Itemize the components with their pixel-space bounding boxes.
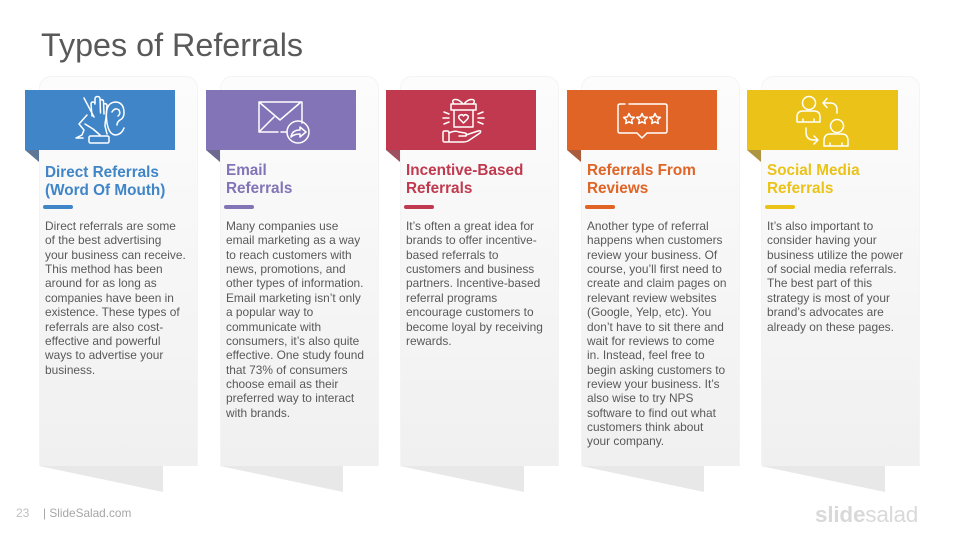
body text: create and claim pages on — [587, 276, 726, 290]
footer site name: | SlideSalad.com — [43, 506, 131, 520]
body text: of the best advertising — [45, 233, 161, 247]
body text: review your business. It’s — [587, 377, 720, 391]
body text: preferred way to interact — [226, 391, 354, 405]
banner — [386, 90, 536, 150]
logo wordmark: slidesalad — [815, 502, 918, 527]
accent bar — [404, 205, 434, 209]
body text: email marketing as a way — [226, 233, 360, 247]
body text: other types of information. — [226, 276, 363, 290]
panel: direct referrals — [25, 76, 198, 492]
icon: hand and ear — [75, 96, 125, 144]
body text: review your business. Of — [587, 248, 717, 262]
body text: communicate with — [226, 320, 321, 334]
banner — [747, 90, 898, 150]
body text: that 73% of consumers — [226, 363, 348, 377]
corner fold — [386, 150, 400, 162]
body text: based referrals to — [406, 248, 499, 262]
banner — [25, 90, 175, 150]
title: Types of Referrals — [41, 27, 303, 63]
body text — [226, 219, 364, 420]
body text: customers think about — [587, 420, 703, 434]
bottom fold — [40, 466, 163, 492]
body text: with brands. — [226, 406, 290, 420]
body text: news, promotions, and — [226, 262, 346, 276]
card background — [39, 76, 198, 466]
accent bar — [585, 205, 615, 209]
body text: of social media referrals. — [767, 262, 897, 276]
heading: Referrals — [767, 180, 833, 197]
heading — [226, 162, 292, 197]
body text: Another type of referral — [587, 219, 709, 233]
body text: partners. Incentive-based — [406, 276, 540, 290]
body text: effective. One study found — [226, 348, 364, 362]
icon: envelope with forward arrow — [258, 101, 310, 144]
bottom fold — [582, 466, 704, 492]
body text: This method has been — [45, 262, 163, 276]
accent bar — [224, 205, 254, 209]
banner — [206, 90, 356, 150]
corner fold — [25, 150, 39, 162]
bottom fold — [221, 466, 343, 492]
body text: strategy is most of your — [767, 291, 890, 305]
corner fold — [747, 150, 761, 162]
body text — [767, 219, 903, 334]
body text: rewards. — [406, 334, 452, 348]
body text — [587, 219, 726, 448]
heading — [45, 164, 165, 199]
heading — [587, 162, 696, 197]
body text: brands to offer incentive- — [406, 233, 537, 247]
card background — [581, 76, 740, 466]
body text: encourage customers to — [406, 305, 534, 319]
body text: your company. — [587, 434, 664, 448]
heading: Reviews — [587, 180, 648, 197]
body text: Many companies use — [226, 219, 338, 233]
body text — [45, 219, 186, 377]
body text: happens when customers — [587, 233, 722, 247]
body text: effective and powerful — [45, 334, 160, 348]
accent bar — [765, 205, 795, 209]
body text: around for as long as — [45, 276, 157, 290]
panel: email referrals — [206, 76, 379, 492]
body text: The best part of this — [767, 276, 872, 290]
heading: (Word Of Mouth) — [45, 182, 165, 199]
heading: Email — [226, 162, 267, 179]
icon: gift on hand — [442, 98, 485, 143]
corner fold — [567, 150, 581, 162]
heading: Social Media — [767, 162, 860, 179]
panel: social media referrals — [747, 76, 920, 492]
card background — [761, 76, 920, 466]
body text: (Google, Yelp, etc). You — [587, 305, 711, 319]
body text: your business can receive. — [45, 248, 186, 262]
panel: referrals from reviews — [567, 76, 740, 492]
body text: become loyal by receiving — [406, 320, 543, 334]
body text: relevant review websites — [587, 291, 717, 305]
heading: Direct Referrals — [45, 164, 159, 181]
body text: It’s often a great idea for — [406, 219, 534, 233]
body text: consumers, it’s also quite — [226, 334, 359, 348]
card background — [220, 76, 379, 466]
panel: incentive-based referrals — [386, 76, 559, 492]
body text: software to find out what — [587, 406, 716, 420]
body text: brand’s advocates are — [767, 305, 884, 319]
icon: two people exchanging arrows — [796, 96, 849, 147]
accent bar — [43, 205, 73, 209]
body text: companies have been in — [45, 291, 174, 305]
body text: consider having your — [767, 233, 877, 247]
body text: Direct referrals are some — [45, 219, 176, 233]
body text: referral programs — [406, 291, 497, 305]
body text: also wise to try NPS — [587, 391, 693, 405]
body text: begin asking customers to — [587, 363, 725, 377]
icon: speech bubble with stars — [617, 103, 668, 139]
body text: already on these pages. — [767, 320, 894, 334]
card background — [400, 76, 559, 466]
heading: Incentive-Based — [406, 162, 523, 179]
body text: business utilize the power — [767, 248, 903, 262]
body text: referrals are also cost- — [45, 320, 163, 334]
bottom fold — [762, 466, 885, 492]
heading: Referrals — [226, 180, 292, 197]
footer page number: 23 — [16, 506, 29, 520]
body text: customers and business — [406, 262, 534, 276]
body text: course, you’ll first need to — [587, 262, 722, 276]
corner fold — [206, 150, 220, 162]
body text: don’t have to sit there and — [587, 320, 724, 334]
body text: choose email as their — [226, 377, 338, 391]
body text: existence. These types of — [45, 305, 180, 319]
body text: in. Instead, feel free to — [587, 348, 705, 362]
heading: Referrals — [406, 180, 472, 197]
heading — [767, 162, 860, 197]
heading — [406, 162, 523, 197]
heading: Referrals From — [587, 162, 696, 179]
body text: to reach customers with — [226, 248, 352, 262]
body text — [406, 219, 543, 348]
body text: Email marketing isn’t only — [226, 291, 361, 305]
body text: wait for reviews to come — [587, 334, 715, 348]
banner — [567, 90, 717, 150]
body text: a popular way to — [226, 305, 313, 319]
body text: It’s also important to — [767, 219, 873, 233]
body text: ways to advertise your — [45, 348, 163, 362]
bottom fold — [401, 466, 524, 492]
body text: business. — [45, 363, 95, 377]
